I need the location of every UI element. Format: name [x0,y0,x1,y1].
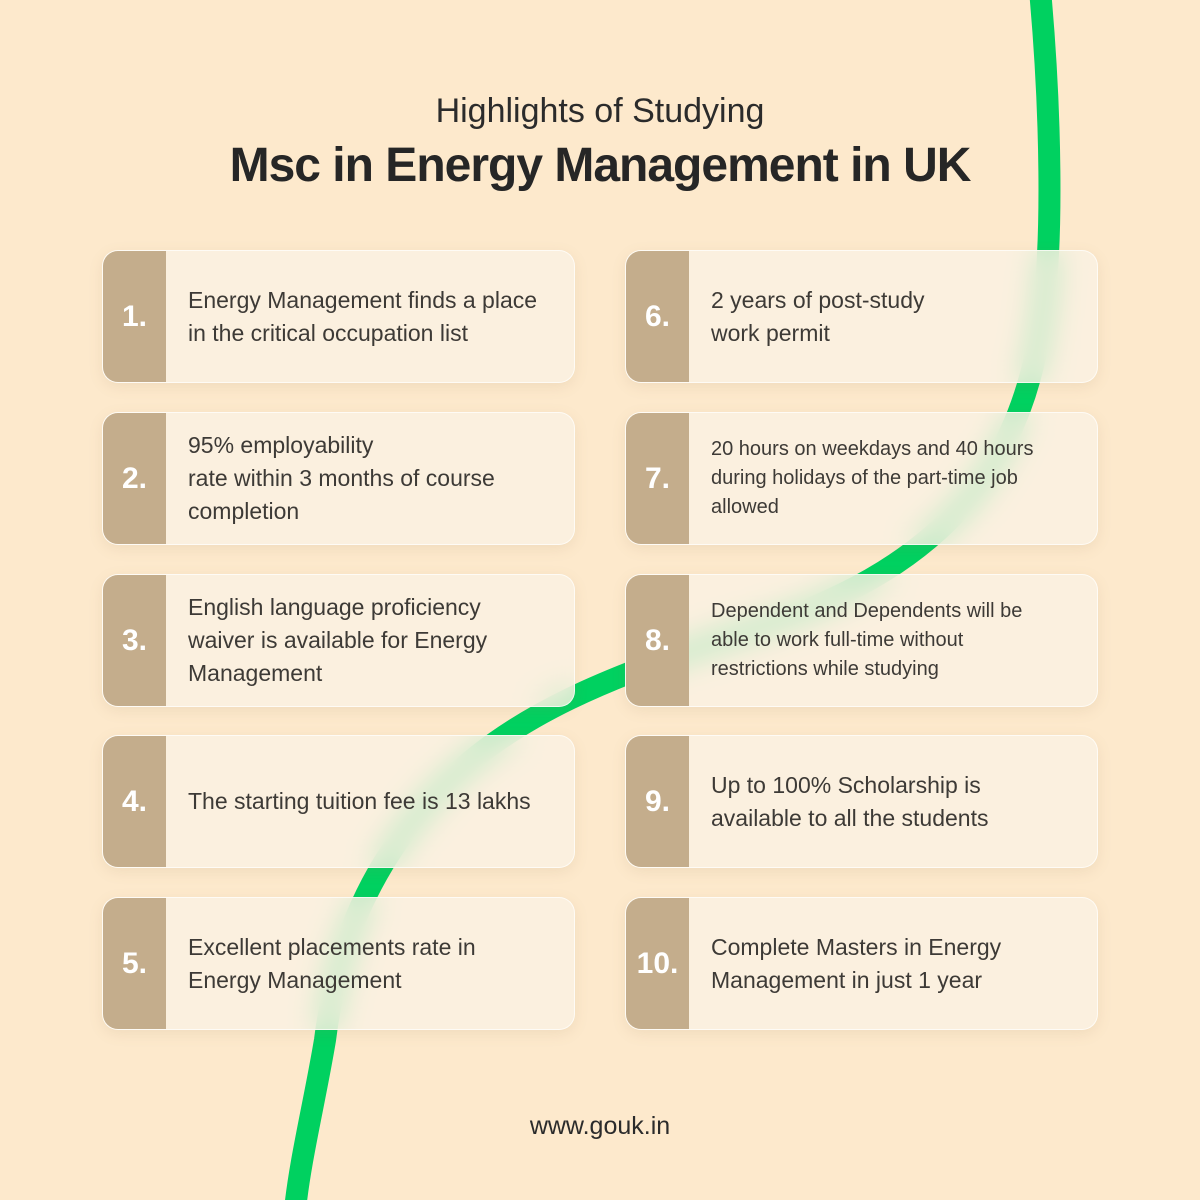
card 8: restrictions while studying [711,658,939,680]
card 6: work permit [711,320,830,346]
card 8: able to work full-time without [711,629,963,651]
card 10: 10. [637,946,678,980]
card 9: available to all the students [711,804,988,830]
card 2: 95% employability [188,432,373,458]
card 7: 7. [645,462,670,494]
card 3: English language proficiency [188,594,481,620]
card 6: 2 years of post-study [711,286,924,312]
card 2: rate within 3 months of course [188,465,495,491]
card 7: during holidays of the part-time job [711,467,1018,489]
card 4: The starting tuition fee is 13 lakhs [188,788,531,814]
card 5 [102,897,575,1030]
card 9: Up to 100% Scholarship is [711,772,981,798]
card 5: 5. [122,946,147,980]
card 9: 9. [645,784,670,818]
card 4: 4. [122,784,147,818]
card 10 [625,897,1098,1030]
card 10: Complete Masters in Energy [711,934,1001,960]
card 2: completion [188,498,299,524]
title: Highlights of Studying [436,92,764,130]
card 1: Energy Management finds a place [188,286,537,312]
card 3: 3. [122,624,147,656]
card 1: 1. [122,300,147,332]
card 7: allowed [711,496,779,518]
card 8: Dependent and Dependents will be [711,600,1022,622]
card 6: 6. [645,300,670,332]
card 2 [102,412,575,545]
card 8 [625,574,1098,707]
card 7 [625,412,1098,545]
card 10: Management in just 1 year [711,966,982,992]
card 6 [625,250,1098,383]
card 1: in the critical occupation list [188,320,468,346]
card 5: Energy Management [188,966,402,992]
card 2: 2. [122,462,147,494]
card 3 [102,574,575,707]
card 4 [102,735,575,868]
card 1 [102,250,575,383]
card 8: 8. [645,624,670,656]
card 7: 20 hours on weekdays and 40 hours [711,438,1033,460]
card 5: Excellent placements rate in [188,934,476,960]
card 3: waiver is available for Energy [188,627,487,653]
footer url: www.gouk.in [530,1112,670,1140]
card 3: Management [188,660,322,686]
card 9 [625,735,1098,868]
subtitle heading: Msc in Energy Management in UK [230,139,970,192]
